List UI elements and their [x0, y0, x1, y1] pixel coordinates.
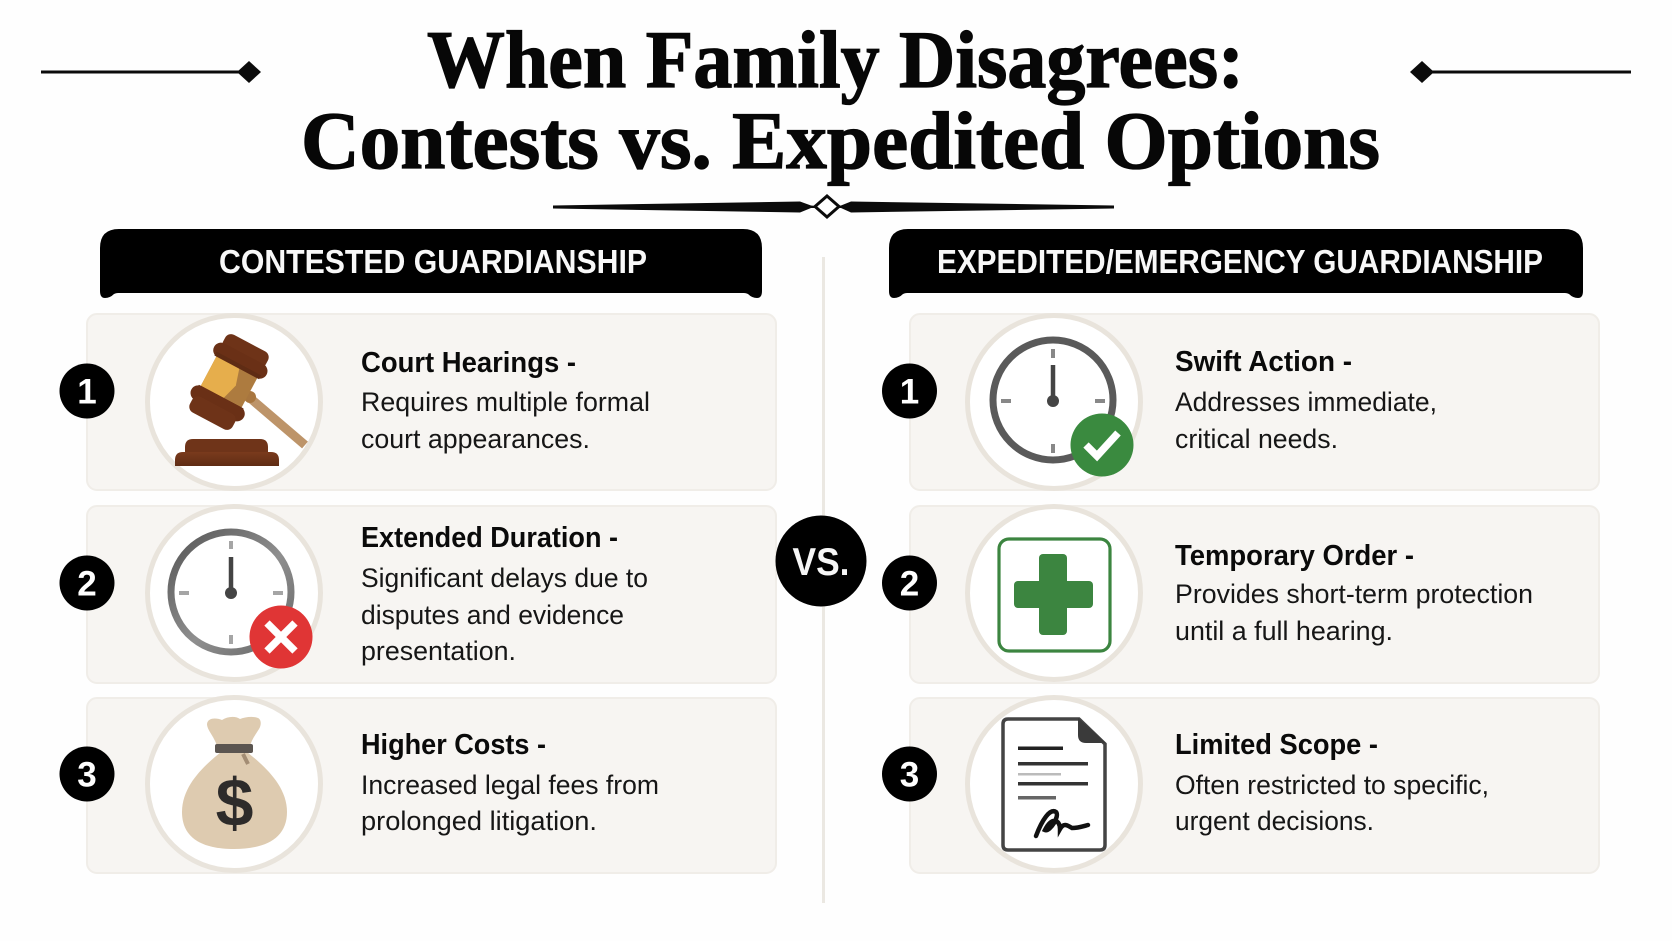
icon: clock with green check [968, 316, 1140, 488]
text: swift action [1175, 346, 1437, 454]
text: court hearings: Requires multiple formal [361, 387, 650, 417]
card background [910, 314, 1599, 490]
icon: green medical cross [968, 506, 1140, 680]
number badge 2 [60, 556, 114, 610]
panel: temporary order [882, 506, 1599, 683]
panel: extended duration [60, 506, 776, 683]
header: contested guardianship [100, 229, 762, 298]
number badge 3: 3 [77, 756, 97, 794]
title: When Family Disagrees: [427, 14, 1244, 105]
text: temporary order: until a full hearing. [1175, 616, 1393, 646]
number badge 3 [882, 746, 937, 802]
text: extended duration: Significant delays due to [361, 563, 648, 593]
number badge 3 [60, 746, 114, 802]
text: higher costs: Higher Costs - [361, 729, 546, 761]
title: Contests vs. Expedited Options [301, 95, 1380, 186]
number badge 3: 3 [900, 756, 919, 794]
panel: court hearings [60, 314, 776, 490]
icon: money bag: $ [216, 765, 253, 841]
icon: clock with red x [148, 506, 320, 680]
text: higher costs [361, 729, 659, 836]
text: court hearings: court appearances. [361, 424, 590, 454]
text: limited scope: Often restricted to specific, [1175, 770, 1489, 800]
vs badge [776, 516, 866, 606]
card background [87, 698, 776, 873]
text: temporary order: Provides short-term protection [1175, 579, 1533, 609]
number badge 2: 2 [77, 564, 97, 604]
card background [87, 314, 776, 490]
right title ornament [1410, 61, 1631, 83]
text: temporary order: Temporary Order - [1175, 540, 1414, 572]
text: court hearings: Court Hearings - [361, 347, 576, 379]
vs badge: VS. [792, 541, 850, 584]
title divider [553, 196, 1114, 217]
header: contested guardianship: CONTESTED GUARDIANSHIP [219, 243, 647, 280]
number badge 2 [882, 556, 937, 610]
card background [910, 506, 1599, 683]
number badge 2: 2 [900, 564, 919, 604]
number badge 1: 1 [77, 372, 97, 412]
text: swift action: Addresses immediate, [1175, 387, 1437, 417]
panel: limited scope [882, 698, 1599, 873]
title [301, 14, 1380, 186]
text: swift action: critical needs. [1175, 424, 1338, 454]
panel: higher costs [60, 698, 776, 873]
number badge 1: 1 [900, 372, 919, 412]
text: limited scope [1175, 729, 1489, 836]
header: expedited/emergency guardianship: EXPEDITED/EMERGENCY GUARDIANSHIP [937, 243, 1543, 280]
text: swift action: Swift Action - [1175, 346, 1352, 378]
center divider line [822, 257, 825, 903]
left title ornament [41, 61, 261, 83]
card background [87, 506, 776, 683]
card background [910, 698, 1599, 873]
icon: gavel [148, 316, 320, 488]
number badge 1 [60, 364, 114, 418]
text: court hearings [361, 347, 650, 454]
text: limited scope: Limited Scope - [1175, 729, 1378, 761]
text: higher costs: Increased legal fees from [361, 770, 659, 800]
header: expedited/emergency guardianship [889, 229, 1583, 298]
icon: money bag [148, 698, 320, 870]
text: extended duration [361, 522, 648, 666]
text: higher costs: prolonged litigation. [361, 806, 597, 836]
panel: swift action [882, 314, 1599, 490]
text: extended duration: presentation. [361, 636, 516, 666]
number badge 1 [882, 364, 937, 418]
text: extended duration: disputes and evidence [361, 600, 624, 630]
text: extended duration: Extended Duration - [361, 522, 618, 554]
icon: signed document [968, 698, 1140, 870]
text: temporary order [1175, 540, 1533, 646]
text: limited scope: urgent decisions. [1175, 806, 1374, 836]
